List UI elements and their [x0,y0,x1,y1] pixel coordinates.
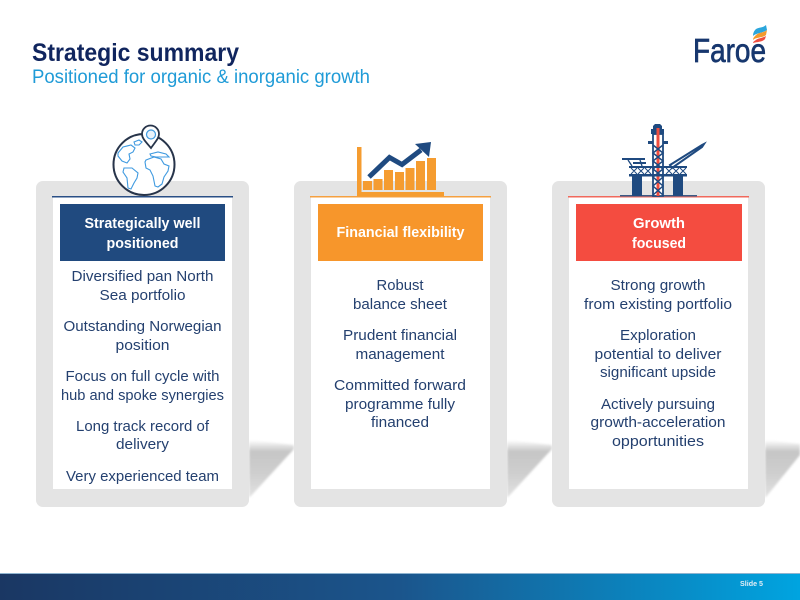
header: growth focused: focused [632,236,686,252]
text block: column 3 points: Actively pursuing [601,397,715,413]
panel: strategically well positioned [36,126,249,507]
title: Strategic summary [32,39,239,67]
text block: column 1 points: delivery [116,437,170,453]
header: financial flexibility [318,204,483,261]
text block: column 1 points: Very experienced team [66,469,219,485]
text block: column 2 points: management [356,347,444,363]
logo: Faroe: Faroe [693,32,766,69]
text block: column 1 points: Long track record of [76,419,210,435]
header: financial flexibility: Financial flexibility [336,225,465,241]
header: strategically well positioned [60,204,225,261]
text block: column 1 points: Diversified pan North [72,269,214,285]
text block: column 2 points: balance sheet [353,297,447,313]
header: growth focused: Growth [633,216,685,232]
panel: growth focused [552,124,765,507]
icon: oil platform [620,124,704,196]
text block: column 3 points: significant upside [600,365,716,381]
icon: bar chart with arrow [357,142,444,196]
text block: column 3 points: from existing portfolio [584,297,732,313]
slide number: Slide 5 [740,579,763,588]
panel: financial flexibility [294,142,507,507]
icon: globe with pin [114,126,174,195]
text block: column 1 points: position [116,338,170,354]
text block: column 1 points: Sea portfolio [100,288,186,304]
text block: column 1 points: Focus on full cycle with [66,369,220,385]
shadow: panel 1 [249,440,294,497]
shadow: panel 2 [507,440,552,497]
text block: column 3 points: Exploration [620,328,696,344]
text block: column 3 points: opportunities [612,434,704,450]
text block: column 1 points: hub and spoke synergies [61,388,224,404]
text block: column 2 points: programme fully [345,397,456,413]
header: strategically well positioned: positioned [106,236,178,252]
header: growth focused [576,204,742,261]
text block: column 2 points: financed [371,415,429,431]
text block: column 2 points: Prudent financial [343,328,457,344]
text block: column 2 points: Committed forward [334,378,466,394]
footer bar [0,573,800,600]
text block: column 3 points: growth-acceleration [590,415,726,431]
header: strategically well positioned: Strategically well [84,216,200,232]
text block: column 2 points: Robust [376,278,424,294]
text block: column 1 points: Outstanding Norwegian [64,319,222,335]
text block: column 3 points: potential to deliver [594,347,722,363]
shadow: panel 3 [765,440,800,497]
text block: column 1 points [61,269,224,485]
subtitle: Positioned for organic & inorganic growth [32,67,370,88]
text block: column 3 points [584,278,732,450]
text block: column 3 points: Strong growth [610,278,706,294]
text block: column 2 points [334,278,466,431]
